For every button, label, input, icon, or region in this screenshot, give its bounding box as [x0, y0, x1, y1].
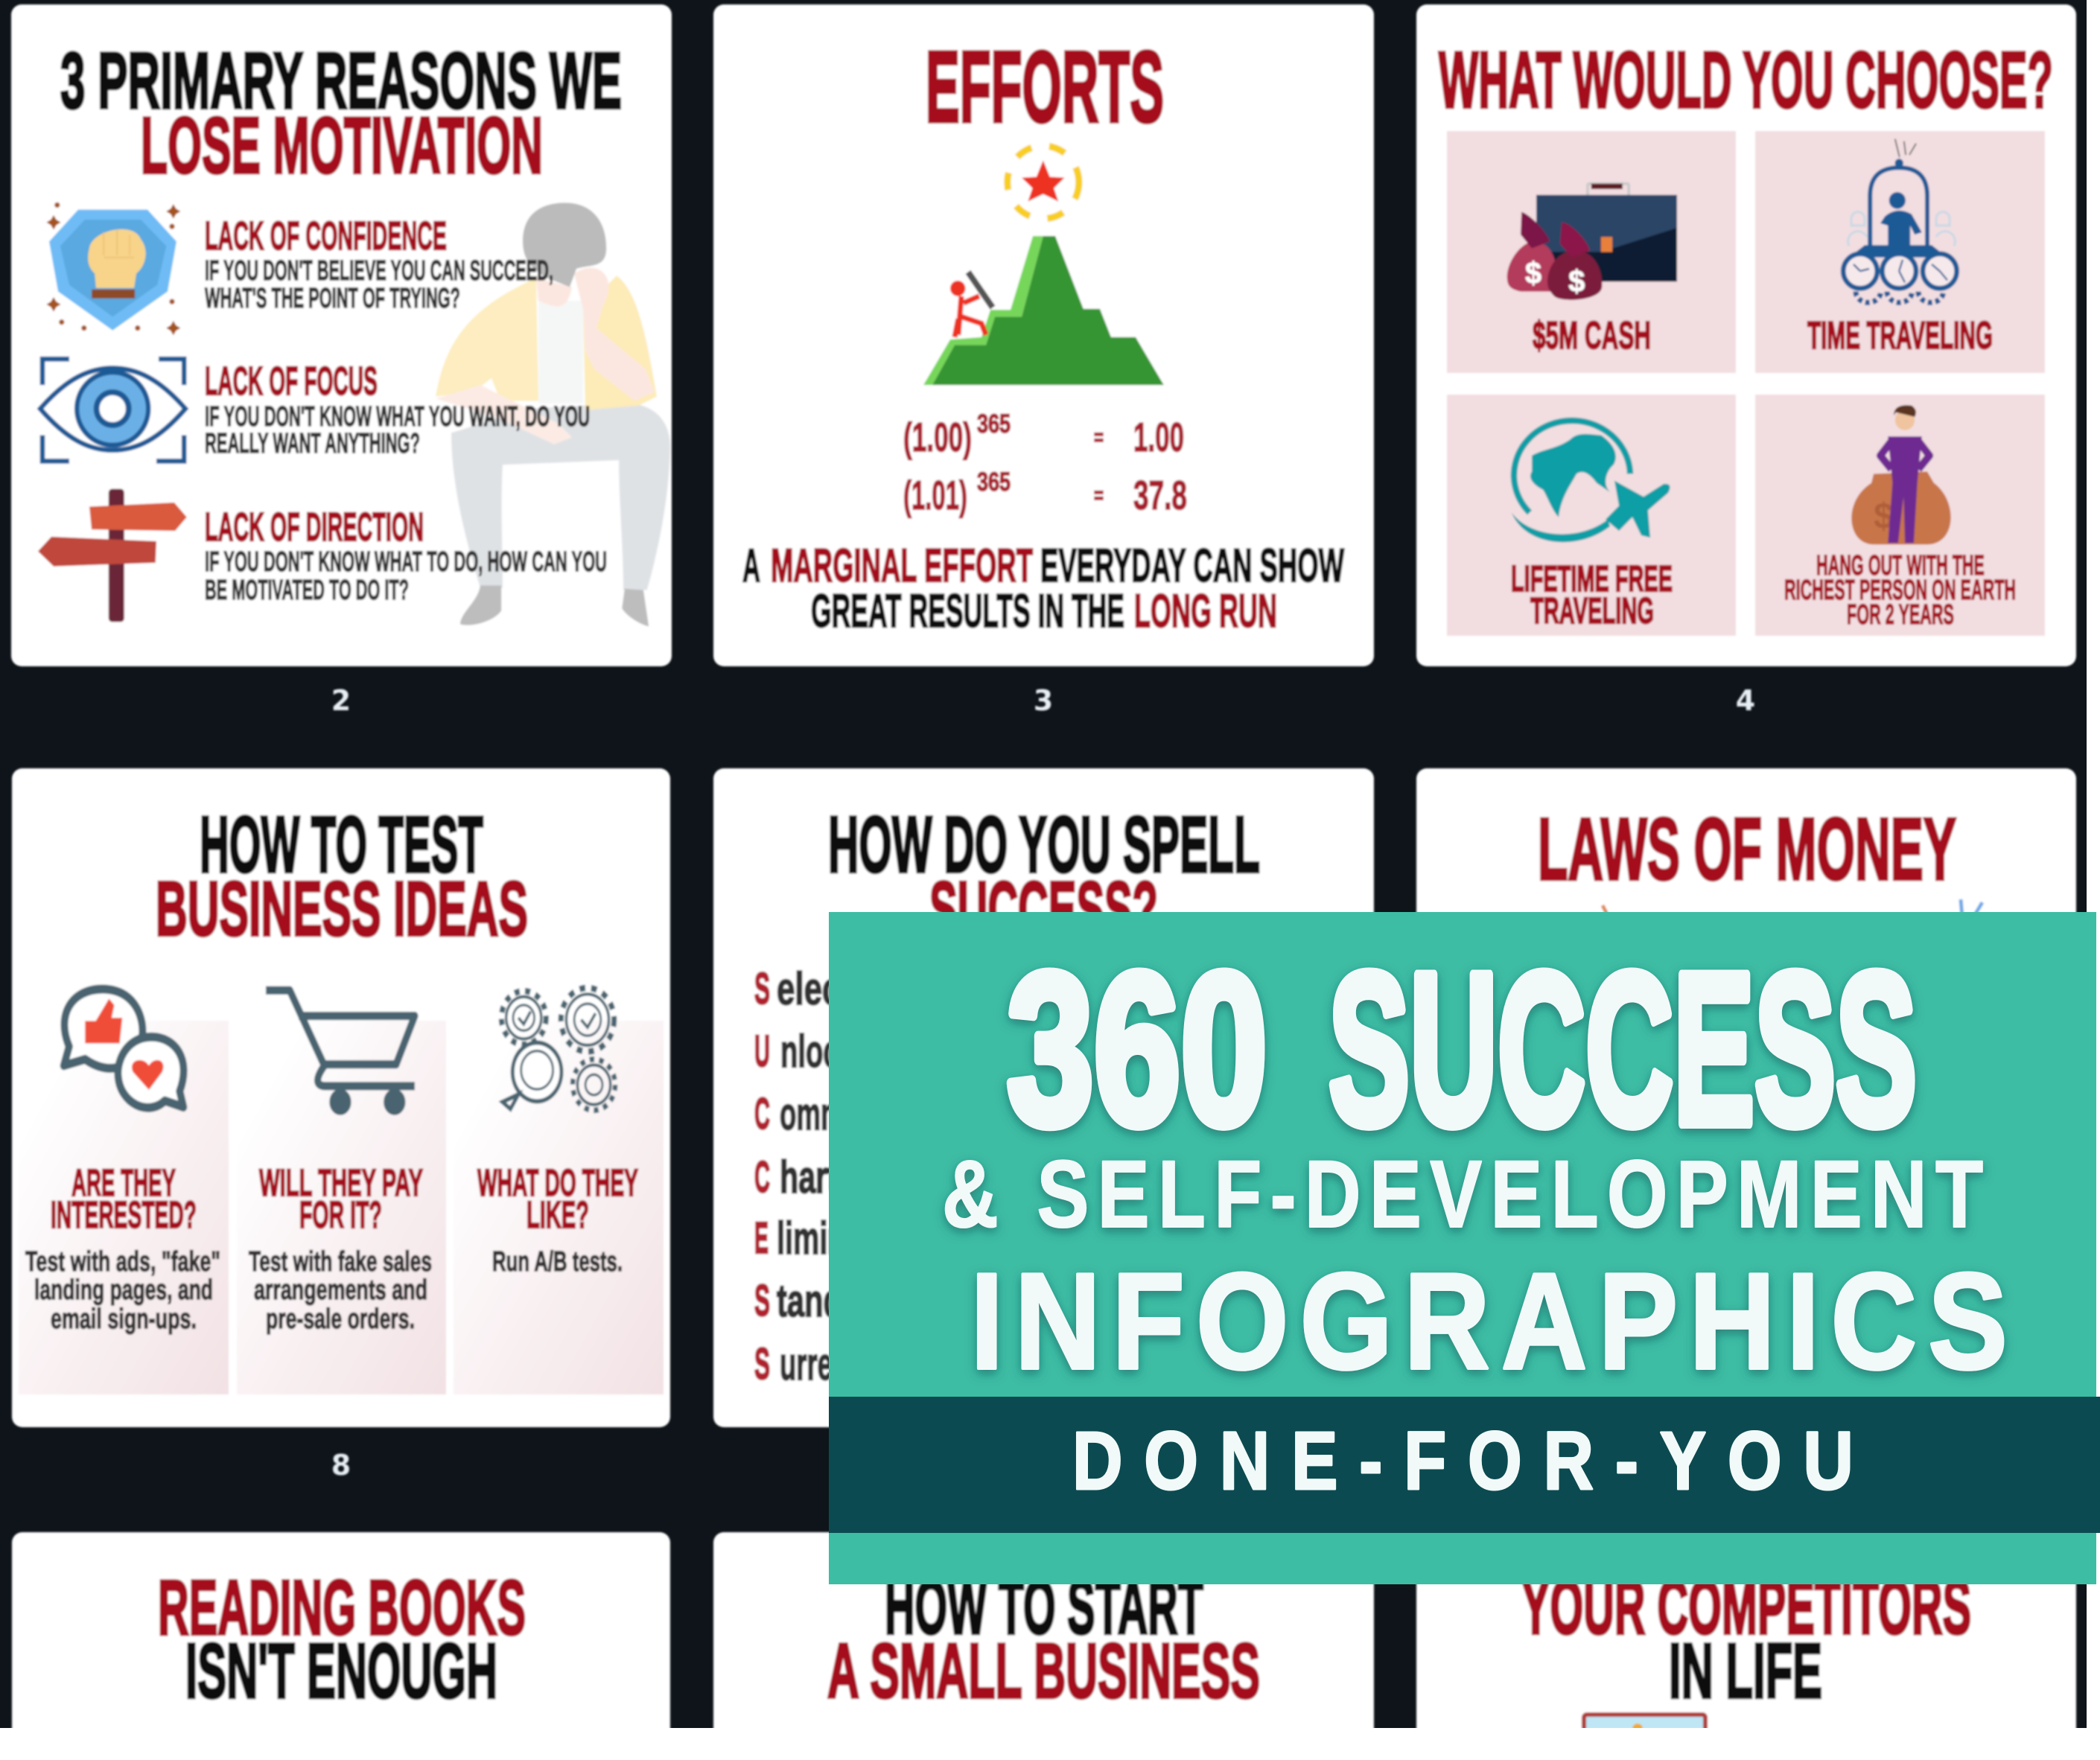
acronym list: U — [754, 1027, 770, 1076]
description — [249, 1246, 432, 1335]
icon: briefcase and money bags: $ — [1525, 257, 1541, 290]
band: done-for-you background — [829, 1397, 2100, 1533]
panel: what would you choose — [1416, 4, 2076, 666]
description — [25, 1246, 220, 1335]
icon: shield with fist — [46, 203, 180, 335]
title: HOW TO TEST — [200, 800, 483, 889]
heading: WHAT DO THEY — [477, 1161, 638, 1204]
panel: how do you spell success — [713, 768, 1374, 1427]
icon: time machine — [1843, 139, 1957, 302]
title: 3 PRIMARY REASONS WE — [60, 36, 622, 125]
label — [1784, 550, 2016, 631]
heading: INTERESTED? — [51, 1193, 197, 1236]
column: what do they like — [454, 988, 664, 1394]
acronym list: S — [754, 964, 770, 1013]
icon: star in dashed ring — [1008, 146, 1079, 219]
label — [1511, 559, 1673, 631]
heading: FOR IT? — [299, 1193, 382, 1236]
text: lack of direction — [205, 505, 607, 606]
headline: 360 success: 360 — [1007, 928, 1267, 1170]
title: READING BOOKS — [158, 1565, 526, 1651]
text: lack of direction: BE MOTIVATED TO DO IT? — [205, 575, 409, 606]
text: lack of focus: LACK OF FOCUS — [205, 359, 378, 404]
label: LIFETIME FREE — [1511, 559, 1673, 599]
acronym list: hart — [780, 1152, 838, 1202]
text: lack of confidence: IF YOU DON'T BELIEVE YOU CAN SUCCEED, — [205, 255, 553, 287]
column: will they pay — [237, 990, 446, 1394]
formula rows: 37.8 — [1133, 472, 1187, 518]
formula rows — [903, 409, 1187, 518]
tagline: done-for-you: DONE-FOR-YOU — [1072, 1415, 1854, 1507]
page number 3: 3 — [1034, 684, 1053, 717]
closing statement — [742, 540, 1344, 637]
description: pre-sale orders. — [266, 1304, 415, 1335]
closing statement: EVERYDAY CAN SHOW — [1040, 540, 1344, 592]
acronym list: liminate — [777, 1213, 888, 1263]
illustration fragments — [1603, 899, 1982, 917]
text: lack of focus — [205, 359, 590, 459]
acronym list: urrender — [780, 1339, 891, 1389]
acronym list: S — [754, 1339, 770, 1388]
description: Run A/B tests. — [492, 1246, 623, 1278]
title: BUSINESS IDEAS — [156, 866, 528, 951]
text: lack of direction: LACK OF DIRECTION — [205, 505, 424, 549]
option: $5M cash — [1447, 131, 1736, 373]
description: landing pages, and — [34, 1275, 213, 1306]
subheadline: self-development: & SELF-DEVELOPMENT — [942, 1141, 1983, 1247]
label: $5M CASH — [1533, 314, 1651, 357]
icon: mountain with climber — [923, 236, 1164, 385]
headline: 360 success — [1007, 928, 1917, 1170]
formula rows: 365 — [977, 468, 1011, 497]
page number 8: 8 — [331, 1449, 351, 1482]
title — [828, 800, 1260, 951]
title — [60, 49, 623, 176]
heading — [51, 1161, 197, 1236]
panel: reading books isn't enough — [12, 1532, 670, 1756]
acronym list: C — [754, 1089, 770, 1138]
option: lifetime free traveling — [1447, 395, 1736, 636]
title: HOW DO YOU SPELL — [828, 800, 1260, 889]
heading — [259, 1161, 423, 1236]
text: lack of focus: REALLY WANT ANYTHING? — [205, 428, 420, 459]
page number 4: 4 — [1736, 684, 1755, 717]
column: are they interested — [19, 989, 229, 1394]
panel: 3 primary reasons we lose motivation — [11, 4, 672, 666]
icon: briefcase and money bags — [1507, 184, 1677, 300]
icon: man on money bag — [1851, 405, 1951, 544]
title — [156, 800, 528, 951]
formula rows: = — [1094, 425, 1104, 450]
formula rows: (1.01) — [903, 472, 967, 518]
headline: infographics: INFOGRAPHICS — [970, 1245, 2008, 1397]
illustration: sad seated person — [436, 203, 670, 627]
icon: gears and magnifier — [501, 988, 615, 1110]
heading: LIKE? — [526, 1193, 589, 1236]
acronym list: ommit — [780, 1088, 862, 1139]
closing statement: LONG RUN — [1134, 585, 1277, 637]
panel: laws of money — [1416, 768, 2076, 1427]
icon: shopping cart — [266, 990, 415, 1111]
description: Test with fake sales — [249, 1246, 432, 1278]
option: hang out with the richest person — [1755, 395, 2045, 636]
panel: your competitors in life — [1416, 1532, 2076, 1756]
closing statement: A — [742, 540, 760, 592]
text: lack of confidence: WHAT'S THE POINT OF TRYING? — [205, 283, 460, 314]
icon: signpost — [38, 489, 187, 622]
text: lack of confidence — [205, 214, 553, 314]
acronym list — [754, 963, 891, 1389]
heading: ARE THEY — [71, 1161, 176, 1204]
formula rows: (1.00) — [903, 414, 972, 460]
icon: globe and plane — [1512, 421, 1670, 542]
formula rows: 1.00 — [1133, 414, 1184, 460]
option: time traveling — [1755, 131, 2045, 373]
title: ISN'T ENOUGH — [185, 1628, 497, 1715]
formula rows: 365 — [977, 409, 1011, 439]
acronym list: nlock — [780, 1026, 855, 1077]
title: LOSE MOTIVATION — [141, 101, 543, 190]
banner: promotional overlay — [829, 912, 2100, 1584]
description: arrangements and — [254, 1275, 427, 1306]
closing statement: GREAT RESULTS IN THE — [811, 585, 1124, 637]
panel: efforts — [713, 4, 1374, 666]
icon: briefcase and money bags: $ — [1568, 265, 1585, 299]
icon: chat bubbles with like and heart — [64, 989, 184, 1108]
description: Test with ads, "fake" — [25, 1246, 220, 1278]
acronym list: elect — [777, 963, 851, 1014]
text: lack of direction: IF YOU DON'T KNOW WHAT TO DO, HOW CAN YOU — [205, 546, 607, 578]
icon: eye in focus brackets — [40, 359, 185, 461]
title — [827, 1564, 1260, 1715]
text: lack of focus: IF YOU DON'T KNOW WHAT YOU WANT, DO YOU — [205, 401, 590, 433]
heading — [477, 1161, 638, 1236]
label: FOR 2 YEARS — [1847, 599, 1954, 631]
acronym list: S — [754, 1276, 770, 1325]
title: EFFORTS — [926, 31, 1164, 143]
description: email sign-ups. — [51, 1304, 197, 1335]
panel: how to start a small business — [713, 1532, 1374, 1756]
acronym list: C — [754, 1152, 770, 1202]
text: lack of confidence: LACK OF CONFIDENCE — [205, 214, 447, 258]
acronym list: E — [754, 1214, 769, 1263]
heading: WILL THEY PAY — [259, 1161, 423, 1204]
acronym list: tand — [777, 1275, 842, 1326]
title: A SMALL BUSINESS — [827, 1628, 1260, 1715]
title — [1521, 1564, 1971, 1715]
panel: how to test business ideas — [12, 768, 670, 1427]
icon: monitor top — [1584, 1715, 1705, 1744]
closing statement: MARGINAL EFFORT — [771, 540, 1033, 592]
title: IN LIFE — [1669, 1628, 1822, 1715]
title — [158, 1565, 526, 1715]
title: HOW TO START — [885, 1564, 1203, 1651]
title: SUCCESS? — [929, 866, 1158, 951]
icon: man on money bag: $ — [1874, 496, 1894, 537]
page number 2: 2 — [331, 684, 351, 717]
formula rows: = — [1094, 483, 1104, 508]
label: TRAVELING — [1530, 591, 1654, 631]
